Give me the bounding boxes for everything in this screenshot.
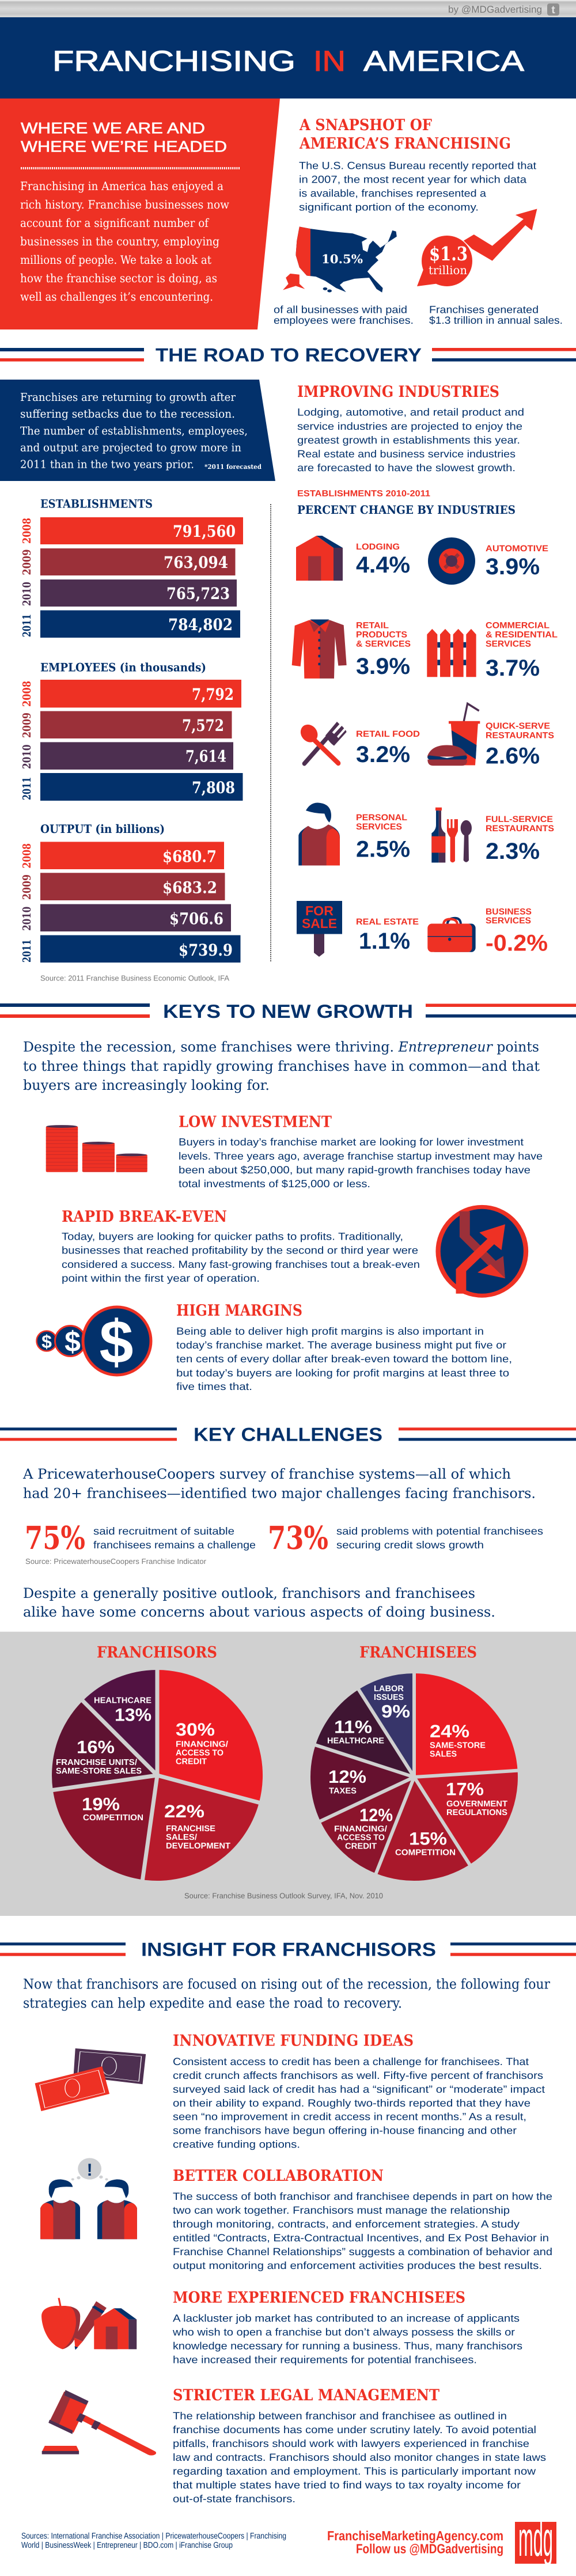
- icon: fence: [427, 629, 476, 677]
- stat: retail products and services: 3.9%: [356, 654, 410, 679]
- text block: more experienced franchisees: [172, 2289, 522, 2366]
- stat: retail food: RETAIL FOOD: [356, 729, 420, 739]
- stat: real estate: REAL ESTATE: [356, 917, 419, 927]
- pie chart: franchisees: FINANCING/: [334, 1824, 387, 1833]
- text block: innovative funding ideas: INNOVATIVE FUNDING IDEAS: [173, 2032, 414, 2050]
- pie chart: franchisees: 15%: [409, 1829, 447, 1849]
- intro text: keys to growth: [23, 1039, 540, 1093]
- heading: A SNAPSHOT OF: [299, 116, 432, 134]
- section header: keys to new growth: [0, 1001, 576, 1022]
- section header: keys to new growth: KEYS TO NEW GROWTH: [163, 1001, 413, 1022]
- stat: quick-serve restaurants: 2.6%: [486, 744, 540, 769]
- paragraph: Lodging, automotive, and retail product and: [297, 407, 524, 418]
- stat: business services: SERVICES: [486, 916, 531, 926]
- text block: stricter legal management: regarding taxation and employment. This is particularly important now: [173, 2465, 536, 2477]
- pie chart: franchisors: SAME-STORE SALES: [56, 1767, 142, 1776]
- intro text: key challenges: had 20+ franchisees—identified two major challenges facing franchisors.: [23, 1486, 536, 1502]
- stat: 75 percent: franchisees remains a challenge: [93, 1539, 256, 1551]
- icon: speech bubble with growth arrow: [417, 209, 537, 286]
- title word: FRANCHISING: [52, 45, 295, 77]
- text block: rapid break-even: Today, buyers are looking for quicker paths to profits. Traditionally,: [62, 1231, 403, 1242]
- bar chart: output: 2008: [21, 843, 33, 869]
- text block: better collaboration: The success of both franchisor and franchisee depends in part on how the: [173, 2191, 552, 2202]
- intro paragraph: millions of people. We take a look at: [20, 253, 211, 267]
- intro paragraph: rich history. Franchise businesses now: [20, 198, 229, 211]
- title banner: [0, 17, 576, 99]
- stat: personal services: [356, 813, 410, 862]
- icon: shirt: [292, 619, 347, 679]
- caption: annual sales: Franchises generated: [429, 304, 539, 316]
- pie chart: franchisees: ISSUES: [374, 1693, 404, 1702]
- stat: quick-serve restaurants: QUICK-SERVE: [486, 721, 550, 731]
- text block: better collaboration: Franchise Channel Relationships” suggests a combination of behavior and: [173, 2246, 552, 2257]
- attribution text: by @MDGadvertising: [448, 4, 542, 15]
- pie chart: franchisees: 12%: [328, 1767, 366, 1787]
- text block: low investment: [179, 1113, 543, 1189]
- bar chart: employees: 2010: [21, 744, 33, 769]
- icon: gavel: [42, 2390, 151, 2454]
- icon: coin stacks: [46, 1125, 147, 1172]
- icon: tire: [428, 537, 475, 585]
- title word: AMERICA: [363, 45, 525, 77]
- stat: full-service restaurants: [486, 815, 554, 864]
- section header: key challenges: [0, 1424, 576, 1445]
- pie chart: franchisors: 16%: [77, 1737, 115, 1757]
- stat: commercial and residential services: & RESIDENTIAL: [486, 630, 558, 639]
- source note: bars: Source: 2011 Franchise Business Economic Outlook, IFA: [40, 974, 229, 983]
- footer call to action: FranchiseMarketingAgency.com: [327, 2528, 503, 2543]
- paragraph: [297, 407, 524, 473]
- panel: return to growth: 2011 than in the two years prior.: [20, 459, 194, 471]
- panel: where we are and where we're headed: [0, 99, 280, 329]
- text block: innovative funding ideas: some franchisors have begun offering in-house financing and other: [173, 2125, 517, 2136]
- paragraph: [299, 160, 536, 213]
- heading: WHERE WE’RE HEADED: [21, 138, 227, 156]
- pie chart: franchisors: ACCESS TO: [176, 1749, 223, 1758]
- pie chart: franchisees: SAME-STORE: [430, 1741, 486, 1750]
- pie chart: franchisors: COMPETITION: [83, 1813, 143, 1823]
- bar chart: employees: 7,792: [192, 685, 234, 704]
- bar chart: employees: 7,572: [182, 716, 224, 735]
- heading: franchisees: FRANCHISEES: [359, 1644, 477, 1662]
- pie chart: franchisees: 12%: [359, 1805, 393, 1825]
- source note: outlook survey: Source: Franchise Business Outlook Survey, IFA, Nov. 2010: [184, 1892, 383, 1900]
- bar chart: establishments: 2010: [21, 582, 33, 606]
- pie chart: franchisors: 30%: [176, 1719, 215, 1740]
- intro paragraph: businesses in the country, employing: [20, 234, 219, 248]
- text block: stricter legal management: [173, 2386, 546, 2505]
- text block: low investment: total investments of $125,000 or less.: [179, 1178, 370, 1189]
- chart title: PERCENT CHANGE BY INDUSTRIES: [297, 503, 516, 517]
- icon: dollar coins: $: [41, 1331, 52, 1352]
- panel: return to growth: The number of establishments, employees,: [20, 425, 248, 437]
- intro paragraph: Franchising in America has enjoyed a: [20, 179, 223, 193]
- bar chart: establishments: 765,723: [166, 584, 230, 603]
- heading: IMPROVING INDUSTRIES: [297, 383, 499, 401]
- bar chart: establishments: 784,802: [168, 615, 233, 634]
- bar chart: output: [21, 822, 241, 963]
- paragraph: significant portion of the economy.: [299, 202, 479, 213]
- text block: better collaboration: output monitoring and enforcement activities produces the best results.: [173, 2260, 542, 2271]
- stat: commercial and residential services: 3.7%: [486, 656, 540, 681]
- intro paragraph: how the franchise sector is doing, as: [20, 271, 217, 285]
- top attribution bar: [0, 0, 576, 17]
- text block: stricter legal management: pitfalls, franchisors should work with lawyers experienced in franchise: [173, 2438, 529, 2449]
- paragraph: is available, franchises represented a: [299, 188, 487, 199]
- text block: innovative funding ideas: [173, 2032, 545, 2150]
- pie chart: franchisors: FRANCHISE UNITS/: [56, 1758, 137, 1767]
- pie chart: franchisees: TAXES: [329, 1786, 357, 1795]
- icon: apple, pencil and schoolhouse: [41, 2298, 137, 2350]
- text block: low investment: been about $250,000, but many rapid-growth franchises today have: [179, 1164, 530, 1176]
- text block: innovative funding ideas: seen “no improvement in credit access in recent months.” As a result,: [173, 2111, 526, 2123]
- pie chart: franchisees: [310, 1673, 518, 1881]
- text block: innovative funding ideas: surveyed said lack of credit has had a “significant” or “moderate” impact: [173, 2083, 545, 2095]
- stat: commercial and residential services: COMMERCIAL: [486, 621, 550, 631]
- pie chart: franchisees: GOVERNMENT: [446, 1800, 507, 1809]
- stat: full-service restaurants: FULL-SERVICE: [486, 815, 553, 824]
- section header: insight for franchisors: [0, 1939, 576, 1960]
- heading: [299, 116, 511, 153]
- bar chart: employees: 2009: [21, 713, 33, 738]
- bar chart: output: 2009: [21, 874, 33, 900]
- paragraph: service industries are projected to enjoy the: [297, 421, 522, 432]
- heading: WHERE WE ARE AND: [21, 120, 205, 137]
- pie chart: franchisees: 11%: [334, 1717, 372, 1737]
- text block: high margins: HIGH MARGINS: [176, 1302, 302, 1320]
- chart title: ESTABLISHMENTS: [40, 497, 153, 510]
- icon: twitter: [547, 3, 559, 16]
- text block: rapid break-even: [62, 1208, 420, 1284]
- text block: low investment: Buyers in today’s franchise market are looking for lower investment: [179, 1137, 524, 1148]
- pie chart: franchisees: CREDIT: [345, 1842, 377, 1851]
- text block: stricter legal management: franchise documents has come under scrutiny lately. To avoid potential: [173, 2424, 536, 2435]
- stat: full-service restaurants: 2.3%: [486, 839, 540, 864]
- caption: share of businesses: [274, 304, 414, 326]
- icon: us map with 10.5 percent: [283, 227, 397, 293]
- stat: commercial and residential services: [486, 621, 558, 681]
- text block: innovative funding ideas: on their ability to expand. Roughly two-thirds reported that they have: [173, 2097, 530, 2109]
- bar chart: employees: 2011: [21, 777, 33, 800]
- text block: better collaboration: [173, 2167, 552, 2271]
- pie chart: franchisees: 17%: [446, 1779, 484, 1800]
- bar chart: output: $706.6: [169, 910, 223, 929]
- icon: two people with speech bubble: !: [87, 2161, 93, 2180]
- text block: stricter legal management: The relationship between franchisor and franchisee as outlined in: [173, 2410, 507, 2422]
- icon: for sale sign: FOR: [305, 903, 334, 918]
- icon: speech bubble with growth arrow: trillion: [429, 263, 467, 277]
- intro text: keys to growth: buyers are increasingly looking for.: [23, 1077, 270, 1093]
- paragraph: The U.S. Census Bureau recently reported that: [299, 160, 536, 172]
- panel: return to growth: [0, 380, 275, 481]
- pie chart: franchisors: 19%: [82, 1794, 120, 1814]
- panel: concerns pies: [0, 1632, 576, 1916]
- icon: briefcase: [427, 918, 476, 952]
- panel: improving industries: [297, 383, 524, 517]
- stat: 73 percent: said problems with potential franchisees: [336, 1525, 543, 1537]
- heading: [21, 120, 227, 156]
- pie chart: franchisees: 24%: [430, 1721, 469, 1741]
- intro text: keys to growth: Despite the recession, some franchises were thriving. Entrepreneur points: [23, 1039, 539, 1055]
- stat: business services: -0.2%: [486, 931, 548, 956]
- text block: innovative funding ideas: credit crunch affects franchisors as well. Fifty-five percent of franchisors: [173, 2070, 543, 2081]
- icon: twitter: t: [551, 4, 555, 16]
- text block: rapid break-even: considered a success. Many fast-growing franchises tout a break-even: [62, 1259, 420, 1270]
- section header: key challenges: KEY CHALLENGES: [194, 1424, 382, 1445]
- subheading: ESTABLISHMENTS 2010-2011: [297, 488, 430, 498]
- stat: automotive: AUTOMOTIVE: [486, 544, 548, 554]
- panel: return to growth: suffering setbacks due to the recession.: [20, 408, 235, 421]
- panel: snapshot of franchising: [274, 116, 563, 326]
- icon: two people with speech bubble: [40, 2158, 137, 2239]
- pie chart: franchisors: FINANCING/: [176, 1740, 228, 1749]
- bar chart: output: $683.2: [162, 878, 217, 897]
- icon: bottle, fork and spoon: [431, 808, 472, 862]
- stat: 73 percent: [268, 1519, 543, 1556]
- intro text: key challenges: A PricewaterhouseCoopers survey of franchise systems—all of which: [22, 1466, 511, 1482]
- stat: 75 percent: 75%: [25, 1519, 85, 1556]
- panel: return to growth: Franchises are returning to growth after: [20, 391, 236, 404]
- pie chart: franchisors: HEALTHCARE: [94, 1696, 151, 1706]
- text block: high margins: [176, 1302, 512, 1392]
- intro text: key challenges: [22, 1466, 536, 1502]
- paragraph: in 2007, the most recent year for which data: [299, 174, 527, 185]
- text: concerns intro: Despite a generally positive outlook, franchisors and franchisees: [23, 1585, 475, 1601]
- bar chart: output: $680.7: [162, 847, 217, 866]
- bar chart: establishments: 791,560: [173, 522, 236, 541]
- chart title: OUTPUT (in billions): [40, 822, 165, 836]
- stat: business services: [486, 907, 548, 956]
- footer sources: World | BusinessWeek | Entrepreneur | BDO.com | iFranchise Group: [21, 2541, 233, 2550]
- paragraph: greatest growth in establishments this year.: [297, 434, 520, 446]
- logo: mdg: [515, 2522, 556, 2564]
- stat: retail food: 3.2%: [356, 742, 410, 767]
- footer sources: [21, 2532, 286, 2550]
- intro paragraph: [20, 179, 229, 304]
- icon: bills: [35, 2048, 146, 2111]
- bar chart: establishments: 2009: [21, 550, 33, 575]
- pie chart: franchisees: SALES: [430, 1749, 457, 1759]
- stat: automotive: 3.9%: [486, 554, 540, 579]
- text block: better collaboration: two can work together. Franchisors must manage the relationship: [173, 2204, 510, 2216]
- bar chart: output: 2011: [21, 940, 33, 963]
- pie chart: franchisors: [52, 1670, 263, 1881]
- bar chart: employees: 2008: [21, 681, 33, 707]
- icon: dollar coins: $: [100, 1308, 133, 1376]
- text block: high margins: five times that.: [176, 1381, 252, 1392]
- stat: quick-serve restaurants: [486, 721, 554, 769]
- icon: spoon and fork: [297, 721, 347, 764]
- text block: more experienced franchisees: knowledge necessary for running a business. Thus, many franchisors: [173, 2340, 522, 2352]
- text block: low investment: levels. Three years ago, average franchise startup investment may have: [179, 1150, 543, 1162]
- text block: rapid break-even: RAPID BREAK-EVEN: [62, 1208, 227, 1226]
- stat: retail products and services: & SERVICES: [356, 639, 411, 649]
- pie chart: franchisees: LABOR: [374, 1684, 404, 1694]
- stat: personal services: 2.5%: [356, 836, 410, 862]
- intro text: insight: strategies can help expedite and ease the road to recovery.: [23, 1995, 402, 2011]
- bar chart: establishments: 2008: [21, 518, 33, 544]
- bar chart: establishments: [21, 497, 243, 638]
- stat: full-service restaurants: RESTAURANTS: [486, 824, 554, 834]
- stat: quick-serve restaurants: RESTAURANTS: [486, 730, 554, 740]
- icon: speech bubble with growth arrow: $1.3: [429, 243, 468, 265]
- icon: for sale sign: SALE: [302, 916, 337, 931]
- text block: more experienced franchisees: MORE EXPERIENCED FRANCHISEES: [173, 2289, 465, 2307]
- stat: 73 percent: 73%: [268, 1519, 328, 1556]
- icon: dollar coins: [37, 1307, 151, 1376]
- stat: personal services: PERSONAL: [356, 813, 407, 823]
- text block: rapid break-even: businesses that reached profitability by the second or third year were: [62, 1245, 418, 1256]
- text block: high margins: Being able to deliver high profit margins is also important in: [176, 1325, 484, 1337]
- stat: commercial and residential services: SERVICES: [486, 639, 531, 649]
- bar chart: establishments: 763,094: [164, 553, 228, 572]
- stat: business services: BUSINESS: [486, 907, 532, 917]
- intro text: insight: [23, 1976, 550, 2011]
- text block: stricter legal management: out-of-state franchisors.: [173, 2493, 295, 2505]
- footer call to action: [327, 2528, 503, 2556]
- intro text: keys to growth: to three things that rapidly growing franchises have in common—and that: [23, 1058, 540, 1074]
- text block: innovative funding ideas: creative funding options.: [173, 2139, 300, 2150]
- text block: more experienced franchisees: who wish to open a franchise but don’t always possess the skills or: [172, 2327, 515, 2338]
- text block: stricter legal management: STRICTER LEGAL MANAGEMENT: [173, 2386, 439, 2404]
- footer call to action: Follow us @MDGadvertising: [356, 2541, 503, 2556]
- bar chart: employees: [21, 660, 243, 801]
- section header: the road to recovery: [0, 344, 576, 365]
- stat: personal services: SERVICES: [356, 822, 402, 832]
- bar chart: employees: 7,614: [185, 747, 226, 766]
- pie chart: franchisors: 22%: [164, 1801, 204, 1821]
- pie chart: franchisees: 9%: [381, 1702, 410, 1722]
- icon: for sale sign: [297, 901, 342, 957]
- stat: retail products and services: [356, 621, 411, 679]
- stat: lodging: 4.4%: [356, 552, 410, 578]
- intro paragraph: account for a significant number of: [20, 216, 209, 230]
- caption: annual sales: $1.3 trillion in annual sales.: [429, 315, 563, 326]
- pie chart: franchisees: HEALTHCARE: [327, 1737, 384, 1746]
- bar chart: output: 2010: [21, 907, 33, 931]
- source note: survey: Source: PricewaterhouseCoopers Franchise Indicator: [25, 1557, 207, 1566]
- text block: better collaboration: entitled “Contracts, Extra-Contractual Incentives, and Ex Post Behavior in: [173, 2232, 549, 2244]
- stat: 75 percent: [25, 1519, 256, 1556]
- text block: more experienced franchisees: A lackluster job market has contributed to an increase of applicants: [173, 2313, 520, 2324]
- pie chart: franchisors: FRANCHISE: [166, 1824, 215, 1833]
- footer sources: Sources: International Franchise Association | PricewaterhouseCoopers | Franchising: [21, 2532, 286, 2541]
- bar chart: output: $739.9: [179, 941, 233, 960]
- caption: share of businesses: employees were franchises.: [274, 315, 414, 326]
- heading: AMERICA’S FRANCHISING: [299, 135, 511, 153]
- icon: dollar coins: $: [65, 1325, 81, 1358]
- text block: rapid break-even: point within the first year of operation.: [62, 1272, 260, 1284]
- bar chart: employees: 7,808: [192, 778, 235, 797]
- stat: lodging: LODGING: [356, 542, 400, 552]
- text block: high margins: today’s franchise market. The average business might put five or: [176, 1339, 506, 1351]
- stat: lodging: [356, 542, 410, 578]
- paragraph: Real estate and business service industries: [297, 448, 516, 460]
- text: concerns intro: [23, 1585, 495, 1620]
- title word: in: IN: [313, 45, 346, 77]
- pie chart: franchisees: COMPETITION: [395, 1848, 456, 1858]
- text: concerns intro: alike have some concerns about various aspects of doing business.: [23, 1604, 495, 1620]
- pie chart: franchisees: REGULATIONS: [446, 1808, 507, 1817]
- stat: retail food: [356, 729, 420, 767]
- bar chart: establishments: 2011: [21, 614, 33, 637]
- text block: more experienced franchisees: have increased their requirements for potential franchisees.: [173, 2354, 477, 2366]
- pie chart: franchisors: SALES/: [166, 1833, 197, 1842]
- text block: high margins: ten cents of every dollar after break-even toward the bottom line,: [176, 1353, 512, 1365]
- text block: better collaboration: through monitoring, contracts, and enforcement strategies. A study: [173, 2218, 520, 2230]
- pie chart: franchisors: 13%: [115, 1704, 151, 1725]
- icon: lodging house: [296, 536, 343, 581]
- panel: return to growth: and output are projected to grow more in: [20, 441, 241, 454]
- intro paragraph: well as challenges it’s encountering.: [20, 290, 213, 304]
- heading: franchisors: FRANCHISORS: [97, 1644, 217, 1662]
- caption: share of businesses: of all businesses with paid: [274, 304, 407, 316]
- section header: insight for franchisors: INSIGHT FOR FRANCHISORS: [141, 1939, 436, 1960]
- caption: annual sales: [429, 304, 563, 326]
- stat: real estate: [356, 917, 419, 954]
- pie chart: franchisors: CREDIT: [176, 1757, 207, 1767]
- forecast note: *2011 forecasted: [204, 463, 262, 471]
- icon: us map with 10.5 percent: 10.5%: [321, 252, 363, 266]
- chart title: EMPLOYEES (in thousands): [40, 660, 206, 674]
- icon: person: [298, 803, 340, 865]
- stat: 75 percent: said recruitment of suitable: [93, 1525, 234, 1537]
- icon: crossing arrows in circle: [435, 1205, 528, 1298]
- text block: better collaboration: BETTER COLLABORATION: [173, 2167, 384, 2185]
- icon: soda and burger: [427, 703, 480, 766]
- stat: real estate: 1.1%: [359, 929, 410, 954]
- text block: innovative funding ideas: Consistent access to credit has been a challenge for franchisees. That: [173, 2056, 529, 2067]
- stat: automotive: [486, 544, 548, 579]
- stat: 73 percent: securing credit slows growth: [336, 1539, 484, 1551]
- text block: stricter legal management: law and contracts. Franchisors should also monitor changes in state laws: [173, 2452, 546, 2463]
- text block: high margins: but today’s buyers are looking for profit margins at least three to: [176, 1367, 509, 1378]
- text block: stricter legal management: that multiple states have tried to find ways to tax royalty income for: [173, 2479, 521, 2491]
- section header: the road to recovery: THE ROAD TO RECOVERY: [156, 344, 422, 365]
- stat: retail products and services: PRODUCTS: [356, 630, 407, 639]
- pie chart: franchisors: DEVELOPMENT: [166, 1842, 230, 1851]
- paragraph: are forecasted to have the slowest growth.: [297, 462, 516, 473]
- pie chart: franchisees: ACCESS TO: [337, 1833, 385, 1842]
- stat: retail products and services: RETAIL: [356, 621, 389, 631]
- text block: low investment: LOW INVESTMENT: [179, 1113, 332, 1131]
